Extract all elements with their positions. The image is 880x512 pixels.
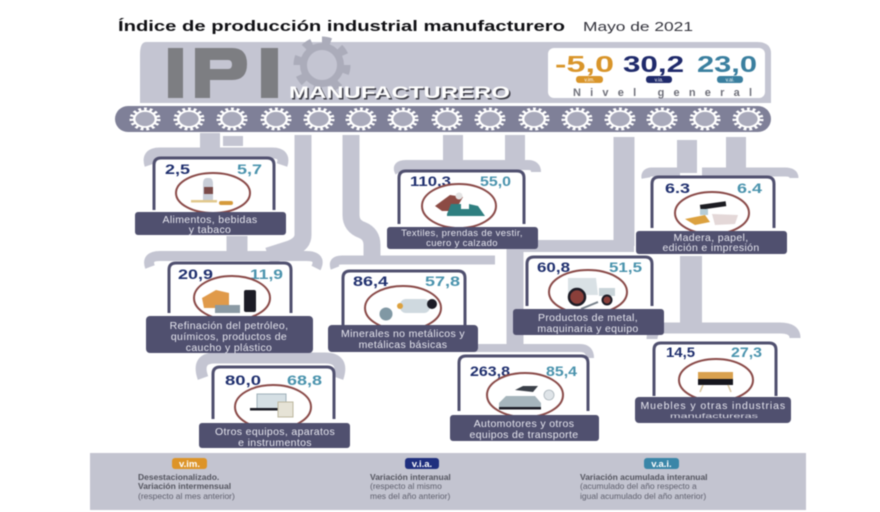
values: 55,0 — [480, 173, 511, 189]
values — [410, 173, 511, 189]
legend: v.ai. — [580, 458, 708, 501]
icon: furniture — [679, 359, 753, 401]
pill: v.im.: v.im. — [584, 78, 595, 84]
value: v.ia.: 30,2 — [623, 51, 684, 77]
label: Muebles y otras industrias — [640, 400, 786, 412]
label — [636, 231, 787, 254]
label — [635, 397, 791, 423]
panel: Productos de metal — [513, 257, 664, 335]
panel: Madera, papel — [636, 177, 787, 254]
values — [666, 344, 762, 360]
label: Refinación del petróleo, — [170, 320, 288, 332]
icon: minerals — [365, 286, 441, 330]
manufacturero wordmark: MANUFACTURERO — [290, 84, 512, 104]
values: 85,4 — [546, 363, 577, 379]
label: químicos, productos de — [171, 331, 287, 343]
manufacturero wordmark: MANUFACTURERO — [289, 83, 510, 102]
legend: v.im.: v.im. — [179, 459, 200, 470]
icon: header gear — [297, 40, 347, 90]
value: v.im.: -5,0 — [555, 51, 614, 77]
values: 80,0 — [225, 372, 261, 388]
legend: v.ia.: v.i.a. — [412, 459, 432, 470]
label: manufactureras — [670, 414, 758, 420]
legend: v.ai.: (acumulado del año respecto a — [580, 481, 697, 491]
legend: v.im. — [138, 458, 235, 501]
values: 263,8 — [470, 363, 510, 379]
label: Productos de metal, — [538, 312, 638, 324]
values: 14,5 — [666, 344, 695, 360]
pill: v.ia.: v.ia. — [655, 78, 663, 84]
values — [470, 363, 577, 379]
values: 11,9 — [250, 266, 283, 282]
general level caption: Nivel general — [573, 87, 752, 99]
values: 27,3 — [731, 344, 762, 360]
legend: v.ai.: v.a.i. — [651, 459, 672, 470]
panel: header — [140, 40, 771, 104]
label — [387, 227, 538, 249]
label: e instrumentos — [238, 437, 312, 449]
icon: tractor — [549, 270, 627, 314]
values: 5,7 — [237, 161, 262, 177]
label: maquinaria y equipo — [537, 323, 639, 335]
icon: bottle and food — [176, 173, 250, 213]
legend: v.ia.: mes del año anterior) — [370, 491, 450, 501]
values — [665, 180, 762, 196]
legend: v.ia. — [370, 458, 451, 501]
values — [178, 266, 283, 282]
label — [513, 309, 664, 335]
connector pipes — [149, 133, 795, 378]
panel: legend — [90, 453, 806, 510]
values: 51,5 — [609, 259, 642, 275]
label: cuero y calzado — [426, 238, 498, 249]
panel: Textiles — [387, 171, 538, 249]
values: 110,3 — [410, 173, 451, 189]
label: caucho y plástico — [186, 342, 272, 354]
icon: vehicles — [487, 373, 563, 417]
icon: clothes — [422, 184, 496, 228]
legend: v.ia.: (respecto al mismo — [370, 481, 442, 491]
values — [353, 273, 460, 289]
label: equipos de transporte — [470, 429, 578, 441]
legend: v.im.: (respecto al mes anterior) — [138, 491, 235, 501]
label — [135, 212, 286, 236]
conveyor belt — [115, 106, 771, 132]
label — [199, 423, 350, 449]
label: Madera, papel, — [674, 232, 748, 244]
values: 86,4 — [353, 273, 388, 289]
label: y tabaco — [189, 224, 231, 236]
panel: Otros equipos — [199, 367, 350, 449]
label — [328, 325, 478, 352]
panel: Alimentos, bebidas y tabaco — [135, 158, 286, 236]
pill: v.ai.: v.ai. — [726, 78, 734, 84]
legend: v.ai.: Variación acumulada interanual — [580, 472, 708, 482]
icon: chemicals — [194, 276, 270, 320]
date: Mayo de 2021 — [583, 19, 693, 34]
legend: v.ia.: Variación interanual — [370, 472, 451, 482]
title: Índice de producción industrial manufacturero — [118, 18, 565, 35]
icon: equipment — [235, 385, 311, 429]
IPI logotype — [168, 48, 278, 98]
label — [146, 316, 313, 354]
pill: v.ia. — [646, 76, 672, 84]
values — [225, 372, 322, 388]
legend: v.im.: Variación intermensual — [138, 481, 231, 491]
legend: v.ai.: igual acumulado del año anterior) — [580, 491, 706, 501]
label: Otros equipos, aparatos — [215, 426, 335, 438]
pill: v.ai. — [717, 76, 743, 84]
values: 20,9 — [178, 266, 213, 282]
label: Alimentos, bebidas — [162, 214, 258, 226]
values — [537, 259, 642, 275]
label — [450, 415, 599, 441]
legend: v.im.: Desestacionalizado. — [138, 472, 219, 482]
pill: v.im. — [576, 76, 603, 84]
manufacturero wordmark — [289, 83, 512, 104]
values: 57,8 — [425, 273, 460, 289]
label: Automotores y otros — [474, 418, 574, 430]
value: v.ai.: 23,0 — [697, 51, 757, 77]
label: edición e impresión — [662, 242, 760, 254]
label: metálicas básicas — [359, 339, 447, 351]
label: Minerales no metálicos y — [341, 328, 465, 340]
values: 68,8 — [287, 372, 322, 388]
icon: wood and paper — [675, 192, 749, 234]
values: 2,5 — [165, 161, 190, 177]
panel: general level — [548, 48, 765, 99]
panel: Minerales no metálicos — [328, 271, 478, 352]
values: 6.3 — [665, 180, 690, 196]
panel: Refinación del petróleo — [146, 263, 313, 354]
values: 60,8 — [537, 259, 570, 275]
label: Textiles, prendas de vestir, — [401, 228, 523, 239]
values — [165, 161, 262, 177]
panel: Muebles — [635, 343, 791, 423]
values: 6.4 — [737, 180, 762, 196]
panel: Automotores — [450, 356, 599, 441]
